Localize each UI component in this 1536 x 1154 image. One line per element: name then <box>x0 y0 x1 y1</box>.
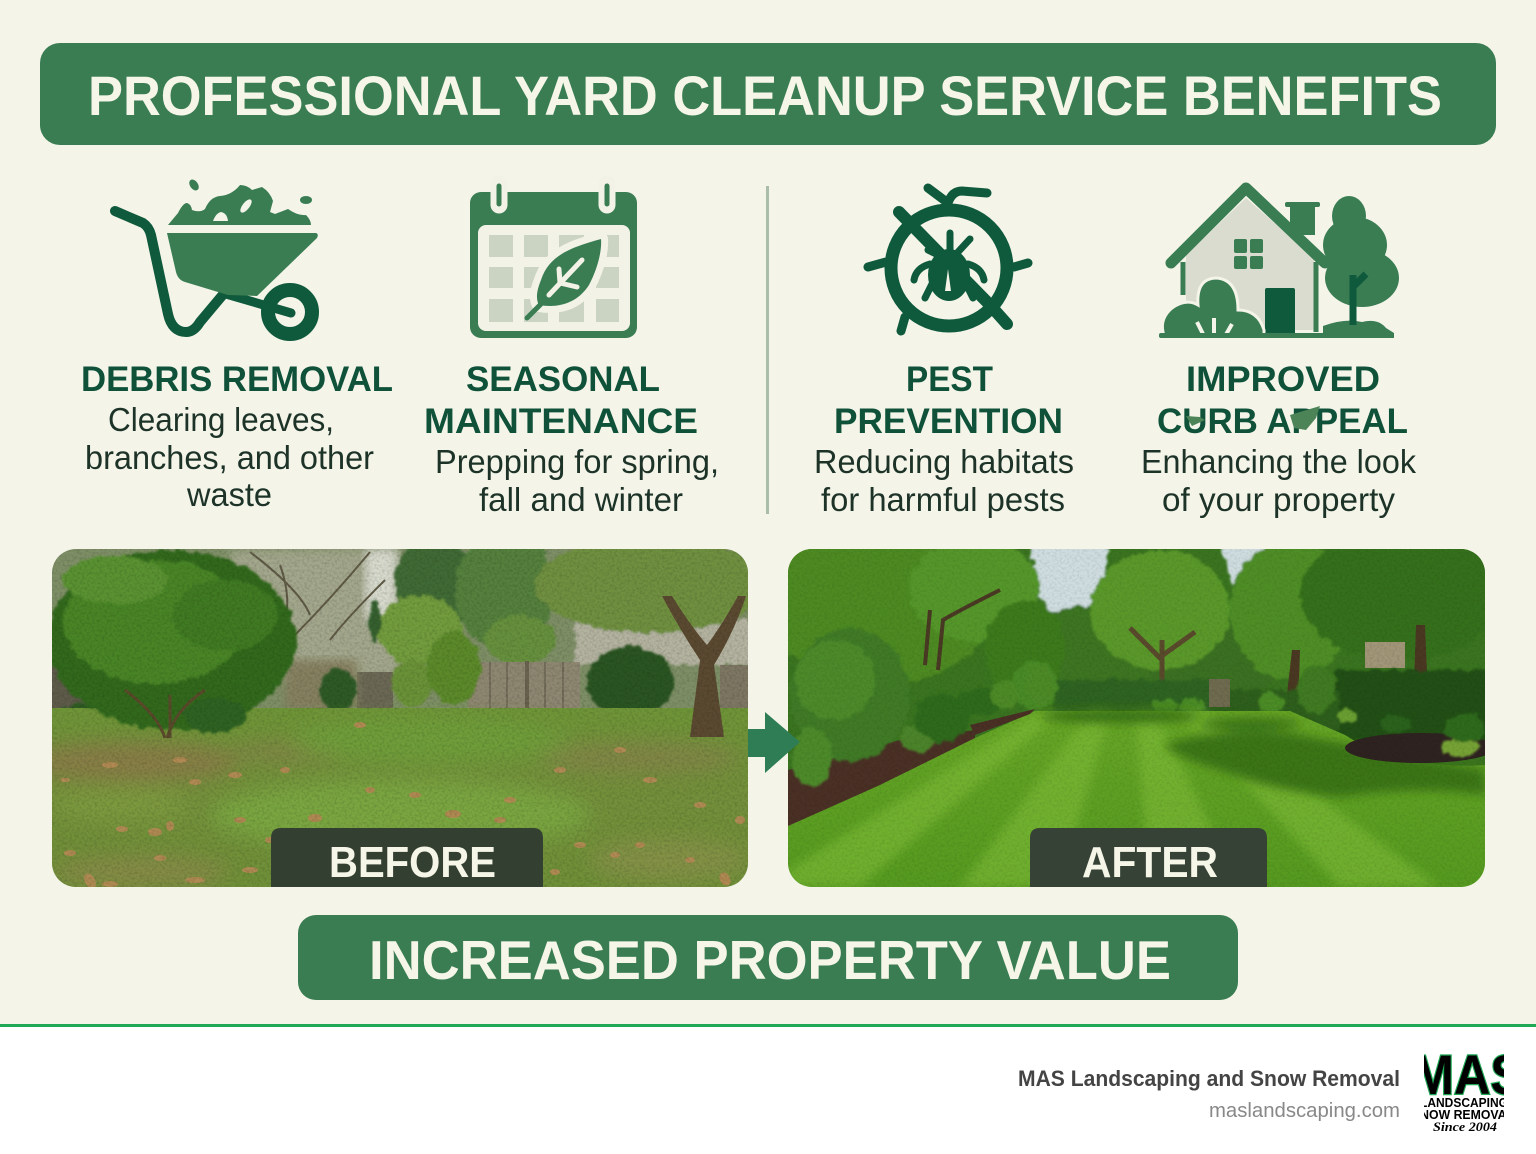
heading <box>424 360 698 441</box>
after label <box>1030 828 1267 887</box>
heading: IMPROVED <box>1186 360 1380 399</box>
icon: crossed-out pest <box>868 188 1028 331</box>
description: fall and winter <box>479 481 683 518</box>
logo <box>1424 1054 1504 1131</box>
grass <box>52 708 748 887</box>
heading: CURB APPEAL <box>1157 402 1408 441</box>
lawn shadows <box>1040 709 1485 797</box>
description: Reducing habitats <box>814 443 1074 480</box>
logo: Since 2004 <box>1433 1119 1498 1134</box>
description: of your property <box>1162 481 1395 518</box>
tree trunks <box>662 596 746 737</box>
description: for harmful pests <box>821 481 1065 518</box>
footer <box>0 1024 1536 1154</box>
heading: MAINTENANCE <box>424 402 698 441</box>
arrow: before to after <box>748 712 800 773</box>
company name: MAS Landscaping and Snow Removal <box>1018 1066 1400 1091</box>
website: maslandscaping.com <box>1209 1100 1400 1122</box>
description: Clearing leaves, <box>108 401 334 438</box>
heading: PEST <box>906 360 993 399</box>
hedges <box>1053 666 1485 740</box>
icon: calendar with leaf <box>470 184 637 338</box>
icon: wheelbarrow <box>115 178 318 334</box>
before label: BEFORE <box>329 838 496 887</box>
icon: house with tree <box>1159 188 1399 338</box>
description <box>1141 443 1416 518</box>
description: Enhancing the look <box>1141 443 1416 480</box>
panel: improved curb appeal <box>1141 188 1416 518</box>
heading: DEBRIS REMOVAL <box>81 360 393 399</box>
before label <box>271 828 543 887</box>
shrubs <box>790 629 1485 787</box>
after label: AFTER <box>1082 838 1218 887</box>
panel: before photo <box>52 549 748 887</box>
heading <box>834 360 1063 441</box>
leaves <box>60 722 745 890</box>
banner text: INCREASED PROPERTY VALUE <box>369 929 1171 991</box>
mulch <box>788 730 975 826</box>
description <box>85 401 374 513</box>
bare branches <box>250 551 386 640</box>
panel: seasonal maintenance <box>424 184 719 518</box>
panel: debris removal <box>81 178 393 513</box>
logo: SNOW REMOVAL <box>1412 1107 1514 1122</box>
heading: PREVENTION <box>834 402 1063 441</box>
description: branches, and other <box>85 439 374 476</box>
value banner <box>298 915 1238 1000</box>
description: waste <box>186 476 272 513</box>
description <box>814 443 1074 518</box>
big shrub <box>48 550 296 733</box>
panel: after photo <box>788 549 1485 887</box>
description <box>435 443 719 518</box>
logo: MAS <box>1412 1043 1524 1106</box>
lawn <box>788 711 1485 887</box>
heading: SEASONAL <box>466 360 660 399</box>
heading <box>1157 360 1408 441</box>
description: Prepping for spring, <box>435 443 719 480</box>
panel: pest prevention <box>814 188 1074 518</box>
logo: LANDSCAPING <box>1420 1095 1508 1110</box>
title banner <box>40 43 1496 145</box>
title: PROFESSIONAL YARD CLEANUP SERVICE BENEFITS <box>88 64 1442 127</box>
